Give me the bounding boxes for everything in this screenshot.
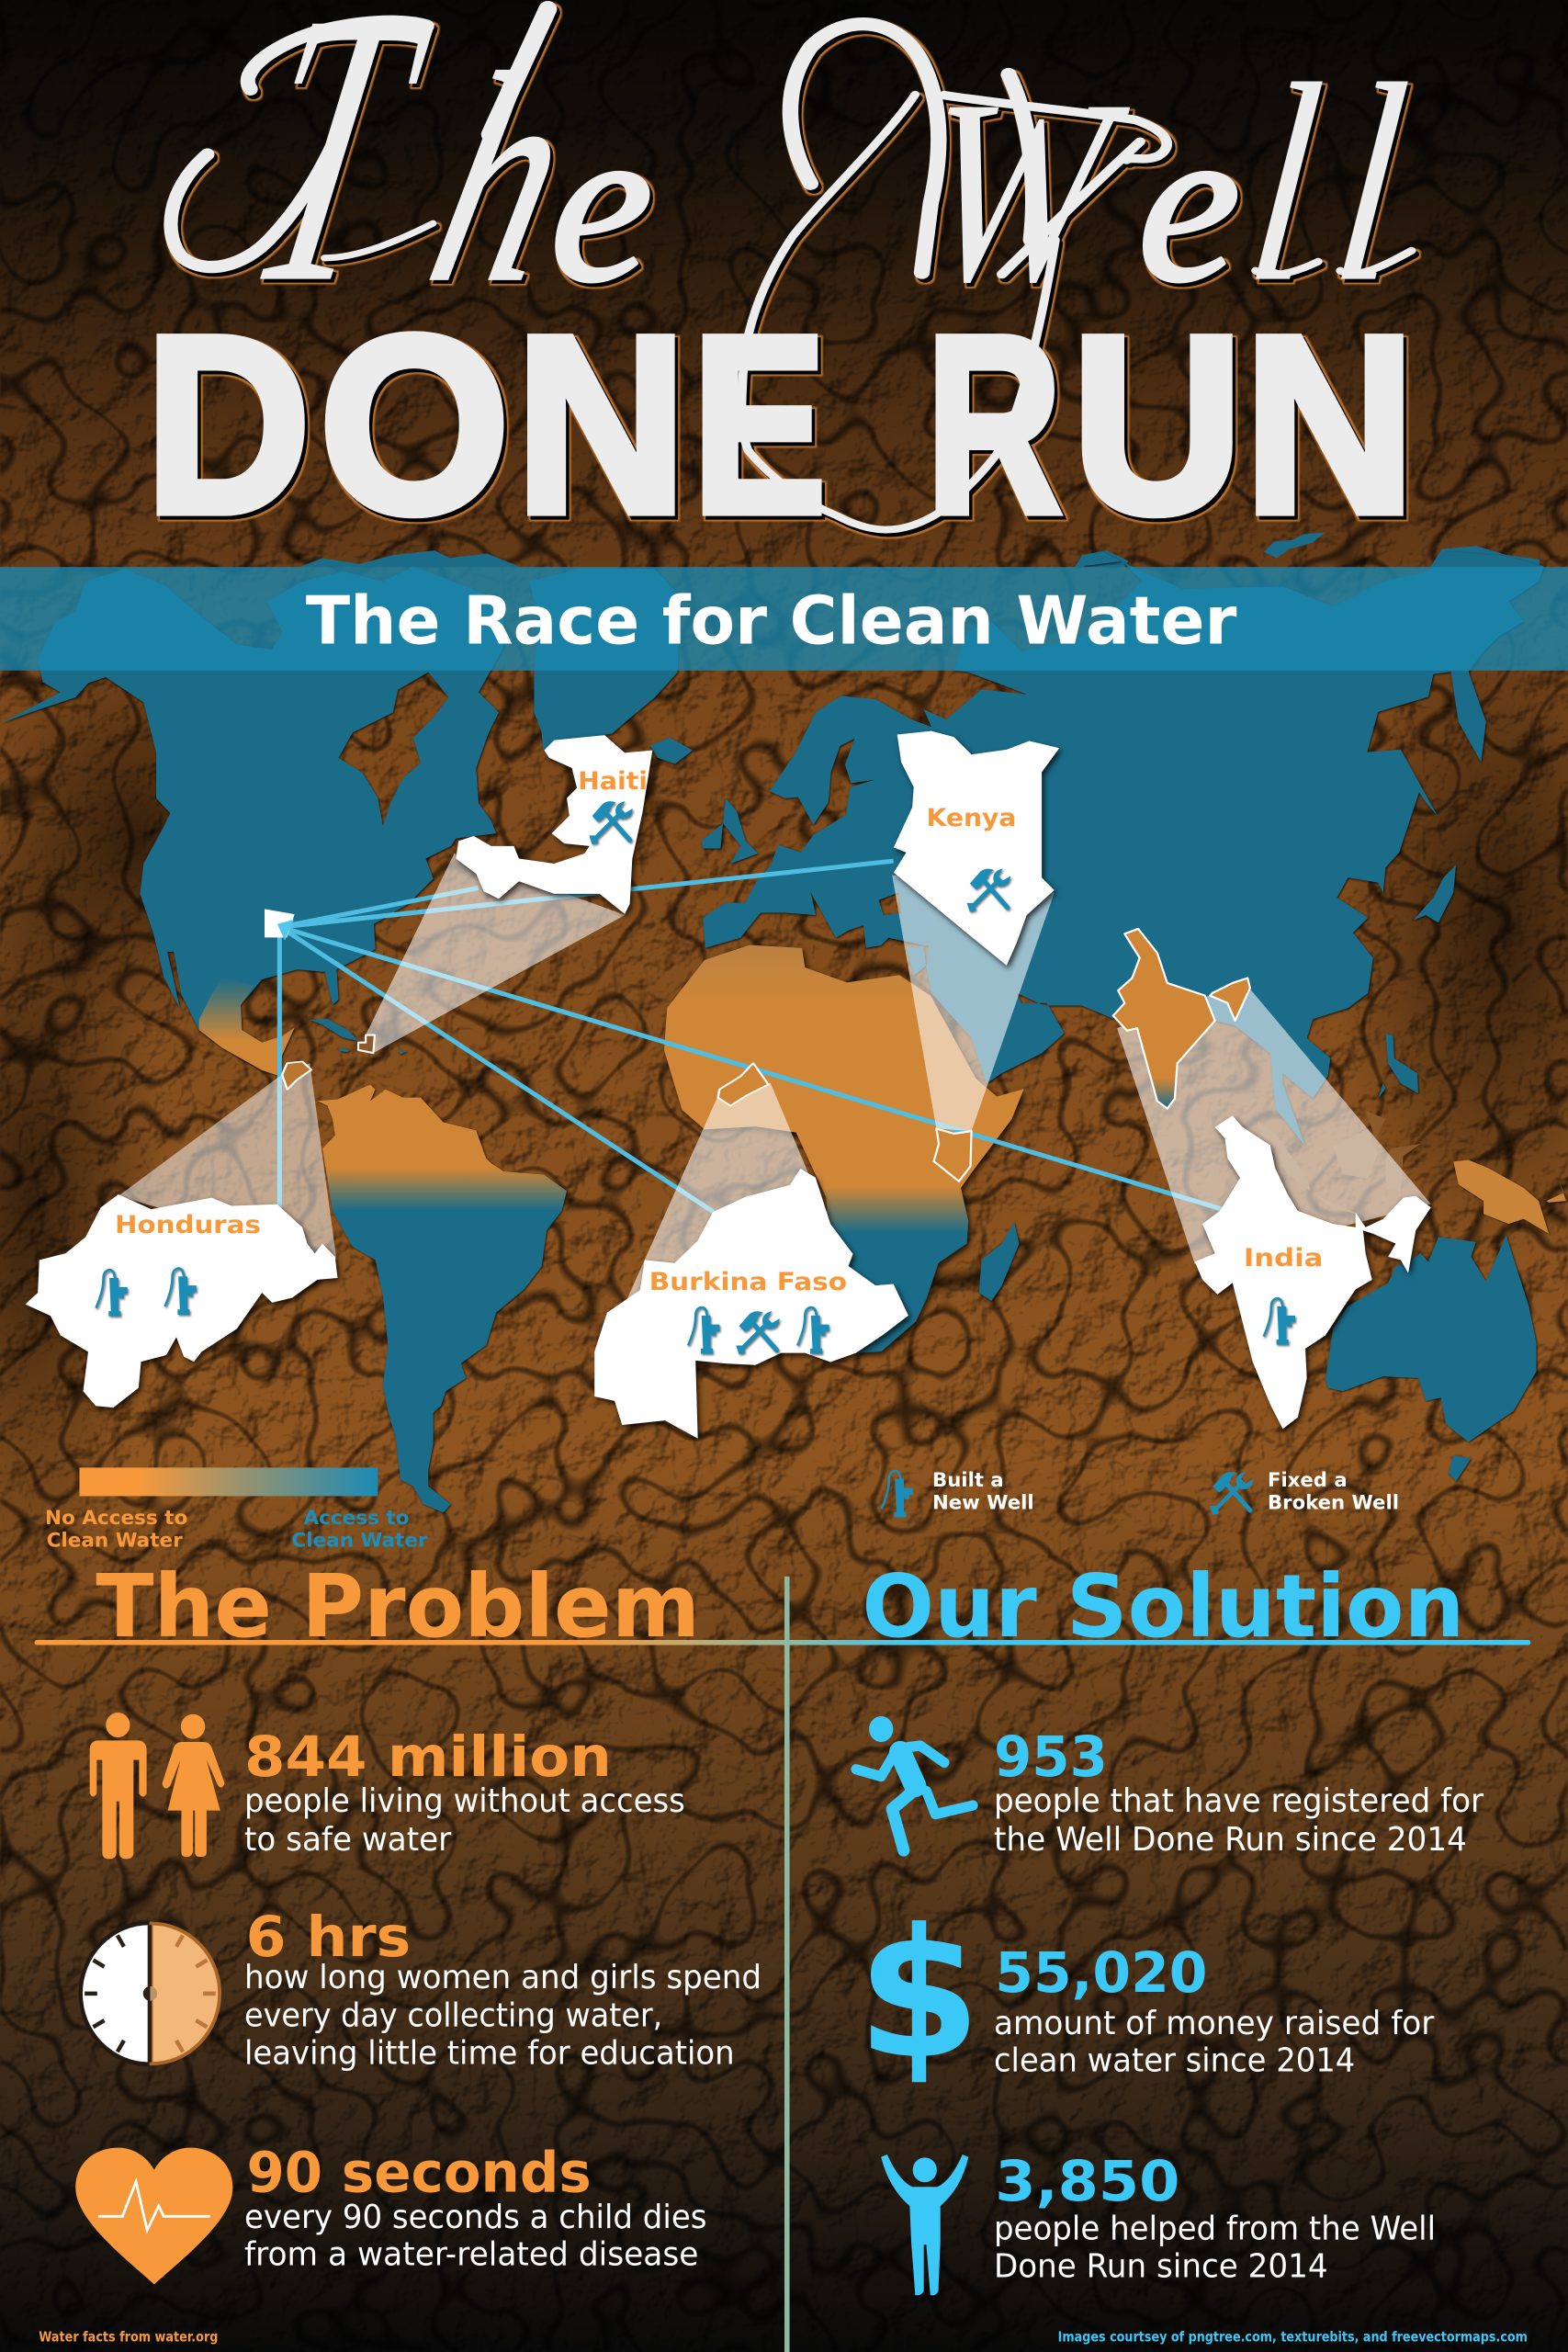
world map [0, 533, 1566, 1512]
icon: person arms raised [881, 2154, 968, 2295]
stat: 844 million: to safe water [244, 1821, 451, 1859]
cone: Haiti [365, 854, 626, 1053]
decorative swashes: The [171, 9, 547, 267]
icon: clock [79, 1920, 220, 2067]
heading: Well: e [1134, 79, 1247, 328]
heading: DONE RUN: O [320, 285, 510, 566]
heading: The [223, 0, 659, 364]
label: Honduras: Honduras [115, 1211, 261, 1239]
stat: 55,020 [994, 1941, 1435, 2080]
heading: DONE RUN: U [1072, 285, 1243, 566]
stat: 6 hrs: 6 hrs [246, 1905, 411, 1970]
stat: 6 hrs: how long women and girls spend [244, 1959, 761, 1996]
stat: 55,020: amount of money raised for [994, 2005, 1435, 2042]
outline: Haiti on map [358, 1035, 375, 1053]
stat: 953 [994, 1725, 1483, 1859]
cone: Burkina Faso [626, 1083, 829, 1304]
cone: India [1117, 983, 1431, 1264]
land: Australia and Tasmania [1325, 1236, 1536, 1481]
outline: Burkina Faso on map [718, 1063, 768, 1106]
heading: Well [912, 26, 1419, 341]
land: Arctic islands above band [299, 533, 1540, 567]
icon: pump 1 in Honduras [96, 1270, 128, 1317]
heading: DONE RUN: N [1245, 285, 1416, 566]
source note: Water facts from water.org [39, 2329, 218, 2346]
stat: 3,850: people helped from the Well [994, 2211, 1436, 2248]
heading: Well: l [1236, 26, 1334, 341]
icon: tools in Kenya [967, 868, 1010, 912]
land: Eurasia [703, 551, 1544, 1147]
land: Papua New Guinea [1453, 1160, 1566, 1234]
heading: DONE RUN: N [515, 285, 686, 566]
enlarged country: Burkina Faso [594, 1169, 908, 1439]
cone: Kenya [892, 875, 1055, 1131]
icon: pump 1 in Burkina Faso [688, 1307, 719, 1353]
legend: fixed a broken well [1210, 1469, 1399, 1515]
stat: 90 seconds: 90 seconds [246, 2141, 592, 2205]
outline: India on map [1113, 929, 1250, 1109]
legend: built a new well: New Well [932, 1491, 1034, 1514]
heading: The: e [547, 79, 659, 328]
stat: 844 million [244, 1725, 685, 1859]
legend: access gradient [45, 1467, 428, 1552]
headquarters marker [265, 909, 295, 941]
panel: our solution [787, 1556, 1530, 2346]
band heading: The Race for Clean Water [306, 582, 1237, 659]
stat: 3,850 [994, 2150, 1436, 2285]
gradient bar [79, 1467, 378, 1496]
stat: 953: 953 [994, 1725, 1108, 1790]
stat: 90 seconds: from a water-related disease [244, 2235, 698, 2273]
label: Haiti: Haiti [578, 767, 648, 796]
stat: 844 million: 844 million [244, 1725, 612, 1790]
land: Madagascar [979, 1222, 1020, 1301]
heading: Well: W [912, 46, 1139, 336]
enlarged country: Honduras [25, 1194, 337, 1408]
stat: 55,020: 55,020 [995, 1941, 1208, 2006]
label: India: India [1244, 1244, 1323, 1272]
small country outlines on map [282, 929, 1250, 1182]
icon: man and woman [90, 1713, 225, 1859]
underline: problem [35, 1640, 787, 1645]
connection lines from headquarters [279, 861, 1222, 1212]
enlarged country: Kenya [894, 731, 1059, 966]
cone: Honduras [118, 1063, 336, 1260]
title band [0, 567, 1568, 671]
icon: pump in India [1264, 1298, 1295, 1345]
legend: built a new well [882, 1469, 1034, 1517]
stat: 90 seconds [244, 2141, 706, 2273]
label: no access: Clean Water [47, 1529, 183, 1552]
icon: pump 2 in Burkina Faso [797, 1307, 829, 1353]
stat: 953: the Well Done Run since 2014 [994, 1821, 1467, 1859]
main title [145, 0, 1419, 566]
underline: solution [787, 1640, 1530, 1645]
outline: Honduras on map [282, 1061, 311, 1090]
label: Burkina Faso: Burkina Faso [649, 1268, 847, 1296]
label: no access: No Access to [45, 1507, 187, 1530]
outline: Kenya on map [934, 1128, 972, 1182]
projection cones [118, 854, 1431, 1304]
enlarged country: India [1195, 1115, 1431, 1429]
land: British Isles [702, 798, 758, 864]
label: access: Clean Water [291, 1529, 428, 1552]
legend: built a new well: Built a [932, 1469, 1004, 1492]
stat: 90 seconds: every 90 seconds a child dies [244, 2199, 706, 2236]
panel: the problem [35, 1556, 787, 2346]
decorative swashes: Well [741, 24, 1412, 530]
heading: DONE RUN: R [927, 285, 1061, 566]
icon: dollar sign: $ [857, 1891, 981, 2098]
legend: fixed a broken well: Broken Well [1268, 1491, 1399, 1514]
stat: 3,850: 3,850 [995, 2150, 1179, 2214]
icon: pump 2 in Honduras [165, 1269, 197, 1315]
heading: Well: l [1322, 26, 1419, 341]
icon: runner [856, 1716, 973, 1850]
stat: 6 hrs: every day collecting water, [244, 1997, 662, 2035]
icon: heart with pulse [75, 2148, 232, 2284]
land: Greenland and Iceland [529, 569, 693, 763]
stat: 6 hrs [244, 1905, 761, 2073]
heading: DONE RUN: E [693, 285, 826, 566]
land: South America with access gradient [318, 1084, 567, 1512]
heading: The: h [406, 11, 598, 345]
land: Africa with access gradient [664, 945, 1024, 1353]
divider: vertical [784, 1577, 790, 2352]
stat: 3,850: Done Run since 2014 [994, 2247, 1328, 2285]
label: Kenya: Kenya [927, 804, 1016, 832]
heading: Our Solution: Our Solution [862, 1556, 1464, 1657]
land: Indonesia islands [1258, 1111, 1421, 1214]
stat: 844 million: people living without access [244, 1782, 685, 1820]
stat: 55,020: clean water since 2014 [994, 2042, 1355, 2080]
stat: 953: people that have registered for [994, 1782, 1483, 1820]
legend: fixed a broken well: Fixed a [1268, 1469, 1348, 1492]
icon: tools in Burkina Faso [736, 1311, 780, 1354]
enlarged country: Haiti [456, 735, 652, 914]
heading: DONE RUN: D [145, 285, 310, 566]
land: North America [0, 566, 503, 1076]
heading: The Problem: The Problem [96, 1556, 700, 1657]
stat: 6 hrs: leaving little time for education [244, 2035, 735, 2073]
icon: tools in Haiti [589, 801, 633, 844]
label: access: Access to [303, 1507, 409, 1530]
